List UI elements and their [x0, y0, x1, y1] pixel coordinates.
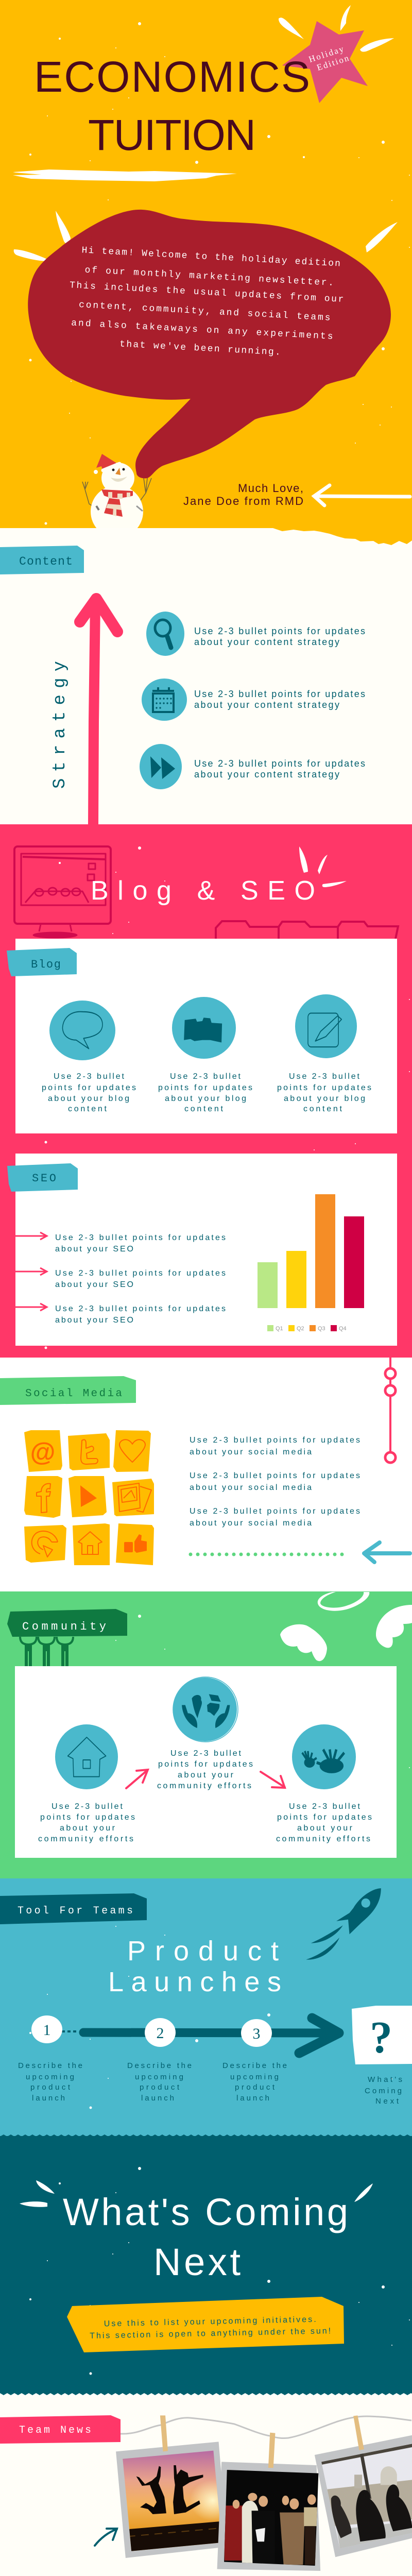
item 2	[142, 679, 365, 721]
heading	[108, 1936, 281, 1997]
strategy arrow	[80, 599, 117, 824]
step 2: launch	[141, 2094, 174, 2103]
community tab: Community	[22, 1620, 106, 1633]
speech bubble	[28, 210, 391, 478]
heading	[63, 2191, 348, 2283]
item 3: Use 2-3 bullet points for updates	[194, 758, 365, 769]
badge text	[307, 43, 350, 74]
blog tab	[7, 948, 77, 976]
blog item 1: Use 2-3 bullet	[54, 1072, 125, 1081]
badge text: Edition	[316, 53, 350, 73]
SEO tab	[7, 1163, 78, 1192]
chart legend	[267, 1325, 347, 1332]
community item 2: Use 2-3 bullet	[170, 1749, 242, 1758]
team tab: Team News	[19, 2425, 91, 2436]
SEO bullet 3: Use 2-3 bullet points for updates	[55, 1304, 226, 1313]
blog item 2: about your blog	[165, 1094, 246, 1103]
bubble message: This includes the usual updates from our	[70, 280, 344, 305]
section: blog and SEO	[0, 824, 412, 1358]
community item 3: Use 2-3 bullet	[289, 1802, 360, 1811]
yellow note: Use this to list your upcoming initiatives.	[104, 2315, 316, 2328]
step 1: Describe the	[18, 2061, 82, 2070]
SEO bullet 2: Use 2-3 bullet points for updates	[55, 1269, 226, 1278]
community tab	[7, 1609, 127, 1637]
next step box: ?	[370, 2013, 392, 2063]
community item 1: community efforts	[38, 1835, 133, 1843]
bubble message: that we've been running.	[119, 339, 281, 358]
title: ECONOMICS	[34, 53, 310, 101]
social tab	[0, 1376, 136, 1405]
next step box: What's	[368, 2075, 402, 2084]
icon: monitor	[14, 846, 111, 938]
icon: heart	[119, 1439, 145, 1462]
photo: third window scene	[315, 2435, 412, 2557]
SEO bullet 1	[15, 1232, 226, 1253]
icon: photos	[118, 1483, 151, 1512]
community item 3	[276, 1724, 372, 1843]
community item 3: about your	[297, 1824, 353, 1833]
icon: facebook	[37, 1484, 50, 1513]
community item 1: points for updates	[40, 1813, 135, 1822]
title	[34, 53, 310, 159]
community item 2	[157, 1677, 253, 1790]
SEO bullet 2: about your SEO	[55, 1280, 133, 1289]
section: social media	[0, 1358, 412, 1591]
social bullets: Use 2-3 bullet points for updates	[190, 1436, 360, 1445]
social bullets: Use 2-3 bullet points for updates	[190, 1507, 360, 1516]
SEO bullet 1: about your SEO	[55, 1245, 133, 1253]
icon: map	[172, 997, 236, 1059]
step 2: product	[140, 2083, 180, 2092]
item 3	[140, 744, 365, 789]
arrow: teal pointer	[95, 2529, 117, 2546]
pink connector	[385, 1358, 396, 1463]
strategy label: Strategy	[50, 661, 70, 789]
item 1: Use 2-3 bullet points for updates	[194, 626, 365, 636]
heading: What's Coming	[63, 2191, 348, 2233]
step 3: launch	[236, 2094, 269, 2103]
blog item 1: points for updates	[42, 1083, 136, 1092]
icon: edit	[295, 994, 357, 1058]
section: community	[0, 1591, 412, 1878]
step 1: 1	[43, 2022, 50, 2039]
photos	[116, 2435, 412, 2571]
bar chart	[258, 1194, 364, 1332]
blog item 3: about your blog	[284, 1094, 365, 1103]
decorative star rays	[14, 5, 398, 261]
step 3: Describe the	[222, 2061, 287, 2070]
SEO bullet 3: about your SEO	[55, 1316, 133, 1325]
section: product launches	[0, 1878, 412, 2136]
icon: hands	[292, 1724, 356, 1789]
signature: Jane Doe from RMD	[183, 495, 303, 507]
icon: twitter	[81, 1439, 98, 1464]
blog item 3: Use 2-3 bullet	[289, 1072, 360, 1081]
step 3: product	[235, 2083, 275, 2092]
step 3: upcoming	[230, 2073, 279, 2081]
signature	[183, 482, 303, 507]
icon: globe	[173, 1677, 238, 1742]
blog tab: Blog	[31, 958, 61, 971]
section: what's coming next	[0, 2134, 412, 2393]
social tab: Social Media	[25, 1388, 122, 1400]
panel: community	[15, 1666, 397, 1858]
yellow note	[67, 2297, 344, 2352]
brush strokes under title	[13, 170, 237, 181]
badge text: Holiday	[307, 44, 345, 64]
blog item 2: points for updates	[158, 1083, 252, 1092]
chart legend: Q4	[339, 1326, 347, 1332]
social bullets: about your social media	[190, 1448, 312, 1456]
blog item 2: content	[184, 1105, 224, 1113]
icon: play	[80, 1485, 97, 1507]
bubble message	[66, 245, 346, 361]
social bullets	[190, 1436, 360, 1528]
blog item 1	[42, 1001, 136, 1113]
signature: Much Love,	[238, 482, 303, 495]
icon: home	[78, 1532, 102, 1554]
icon: magnifier	[146, 612, 184, 656]
icon: fast forward	[140, 744, 182, 789]
step 3: 3	[252, 2025, 261, 2042]
tools tab	[0, 1893, 147, 1924]
people icons	[20, 1637, 73, 1667]
step 1	[18, 2015, 82, 2103]
blog item 3: content	[303, 1105, 342, 1113]
SEO bullet 3	[15, 1303, 226, 1325]
step 2	[127, 2018, 192, 2103]
holiday star badge	[282, 21, 368, 103]
decorative rays	[20, 2180, 373, 2207]
heading: Blog & SEO	[91, 876, 315, 906]
icon: calendar	[142, 679, 187, 721]
section: content	[0, 528, 412, 824]
SEO bullet 2	[15, 1268, 226, 1289]
panel: blog	[7, 939, 397, 1133]
bubble message: of our monthly marketing newsletter.	[84, 265, 334, 289]
arrow: signature pointer	[314, 485, 410, 505]
folders sketch	[216, 921, 398, 939]
heading: Launches	[108, 1967, 281, 1997]
bubble message: and also takeaways on any experiments	[71, 318, 333, 342]
section: yellow header	[0, 0, 412, 538]
icon: house	[55, 1724, 118, 1789]
community item 3: community efforts	[276, 1835, 370, 1843]
icon: refresh	[32, 1531, 58, 1557]
arrow: community 1 to 2	[126, 1770, 148, 1788]
item 1: about your content strategy	[194, 637, 339, 647]
photo: jumping silhouettes	[116, 2442, 221, 2558]
arrow: blue pointer	[364, 1543, 410, 1562]
social bullets: about your social media	[190, 1519, 312, 1528]
clothes pegs	[160, 2415, 364, 2468]
arrow: community 2 to 3	[261, 1772, 285, 1788]
step 3	[222, 2019, 287, 2103]
chart legend: Q1	[276, 1326, 283, 1332]
community item 2: community efforts	[157, 1782, 251, 1790]
blog item 1: about your blog	[48, 1094, 129, 1103]
icon: speech bubble	[49, 1001, 115, 1060]
heading: Next	[153, 2241, 241, 2283]
dotted divider	[191, 1553, 346, 1556]
step 1: product	[30, 2083, 71, 2092]
community item 2: points for updates	[158, 1760, 253, 1769]
next step box	[352, 2006, 412, 2106]
timeline arrow	[62, 2018, 339, 2053]
blog item 1: content	[68, 1105, 107, 1113]
bubble message: content, community, and social teams	[79, 300, 331, 324]
community item 1: about your	[60, 1824, 115, 1833]
social bullets: Use 2-3 bullet points for updates	[190, 1471, 360, 1480]
SEO bullet 1: Use 2-3 bullet points for updates	[55, 1233, 226, 1242]
icon: rocket	[306, 1888, 381, 1960]
item 2: Use 2-3 bullet points for updates	[194, 689, 365, 699]
heading: Product	[127, 1936, 279, 1967]
content tab	[0, 546, 84, 574]
blog item 3: points for updates	[277, 1083, 371, 1092]
community item 3: points for updates	[277, 1813, 372, 1822]
tools tab: Tool For Teams	[18, 1905, 133, 1917]
SEO tab: SEO	[32, 1172, 56, 1185]
icon: thumbs up	[124, 1534, 147, 1553]
icon: at sign: @	[30, 1437, 55, 1466]
bubble message: Hi team! Welcome to the holiday edition	[81, 245, 340, 269]
content tab: Content	[19, 555, 73, 568]
wings	[280, 1605, 412, 1661]
title: TUITION	[88, 111, 256, 159]
item 2: about your content strategy	[194, 700, 339, 710]
yellow note: This section is open to anything under the sun!	[90, 2327, 331, 2341]
blog item 3	[277, 994, 371, 1113]
step 2: upcoming	[135, 2073, 183, 2081]
blog item 2: Use 2-3 bullet	[170, 1072, 241, 1081]
rope	[121, 2416, 411, 2438]
community item 2: about your	[178, 1771, 234, 1780]
community item 1: Use 2-3 bullet	[52, 1802, 123, 1811]
chart legend: Q3	[318, 1326, 325, 1332]
social icon tiles	[24, 1430, 154, 1565]
brush edge	[273, 528, 412, 545]
halo	[318, 1592, 369, 1611]
next step box: Next	[375, 2097, 399, 2106]
step 1: launch	[32, 2094, 65, 2103]
step 2: Describe the	[127, 2061, 192, 2070]
community item 1	[38, 1724, 135, 1843]
step 2: 2	[157, 2025, 164, 2042]
photo: toasting group	[217, 2462, 320, 2571]
item 3: about your content strategy	[194, 769, 339, 779]
decorative rays	[299, 846, 347, 887]
section: team news	[0, 2393, 412, 2576]
next step box: Coming	[365, 2087, 402, 2095]
panel: SEO	[7, 1154, 397, 1346]
team tab	[0, 2415, 121, 2444]
snowman	[82, 454, 152, 528]
chart legend: Q2	[297, 1326, 304, 1332]
step 1: upcoming	[26, 2073, 74, 2081]
blog item 2	[158, 997, 252, 1113]
social bullets: about your social media	[190, 1483, 312, 1492]
item 1	[146, 612, 365, 656]
